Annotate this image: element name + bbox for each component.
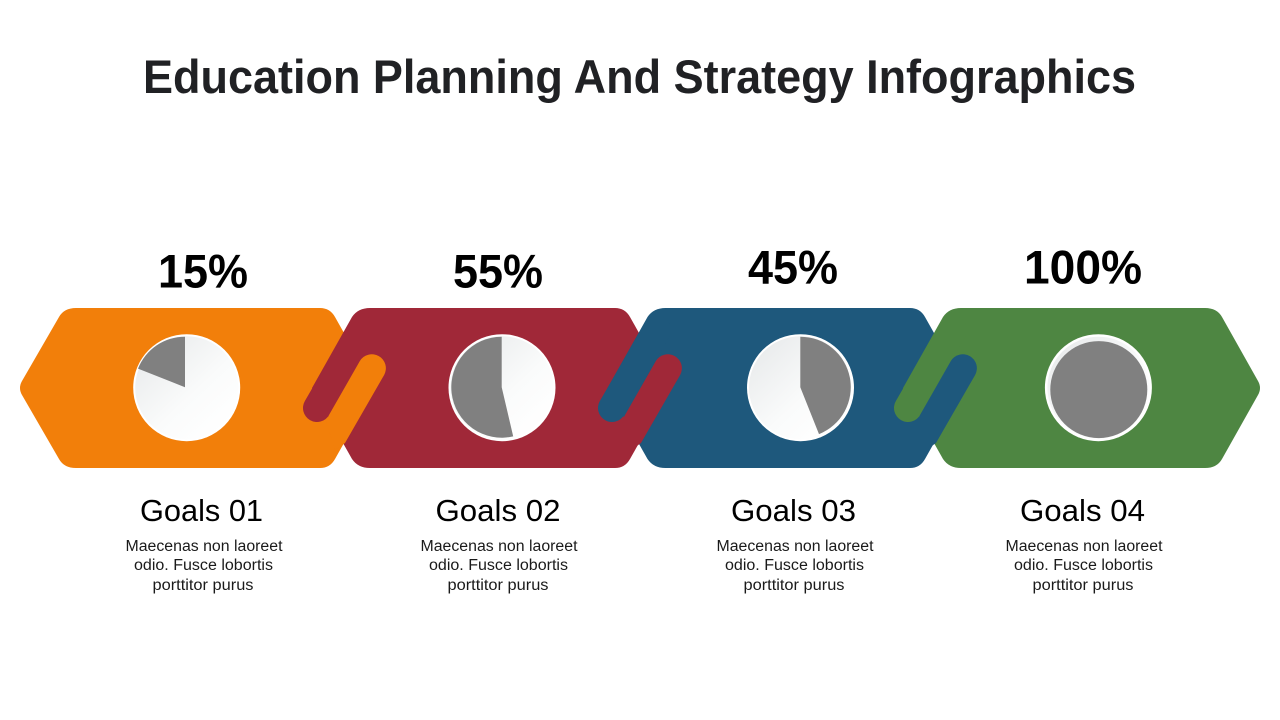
text block: goal 4: Maecenas non laoreet	[1006, 538, 1163, 555]
text block: goal 3: porttitor purus	[744, 577, 845, 594]
connector: red finger	[622, 354, 682, 450]
text block: goal 1: Maecenas non laoreet	[126, 538, 283, 555]
text block: goal 2	[420, 493, 578, 594]
text block: goal 2: Maecenas non laoreet	[420, 538, 578, 555]
percentage: 45%: 45%	[748, 240, 838, 294]
text block: goal 4	[1006, 493, 1163, 594]
text block: goal 2: odio. Fusce lobortis	[429, 557, 568, 574]
text block: goal 3: Maecenas non laoreet	[716, 538, 874, 555]
pie chart: 45%	[747, 334, 854, 441]
text block: goal 3: odio. Fusce lobortis	[725, 557, 864, 574]
pie chart: 55%	[448, 334, 556, 441]
pie chart: 15%	[133, 334, 240, 441]
panel: goal 1 hexagon	[20, 308, 375, 468]
text block: goal 1: porttitor purus	[152, 577, 254, 594]
text block: goal 1	[126, 493, 283, 594]
percentage: 55%: 55%	[453, 244, 543, 298]
text block: goal 2: porttitor purus	[448, 577, 549, 594]
connector: orange finger	[326, 354, 386, 450]
text block: goal 2: Goals 02	[436, 493, 560, 528]
text block: goal 1: Goals 01	[140, 493, 263, 528]
percentage: 100%: 100%	[1024, 240, 1142, 294]
panel: goal 4 hexagon	[903, 308, 1260, 468]
panel: goal 2 hexagon	[312, 308, 670, 468]
percentage: 15%: 15%	[158, 244, 248, 298]
text block: goal 4: Goals 04	[1020, 493, 1145, 528]
text block: goal 1: odio. Fusce lobortis	[134, 557, 273, 574]
text block: goal 3	[716, 493, 874, 594]
pie chart: 100%	[1045, 334, 1152, 441]
connector: blue finger	[917, 354, 977, 450]
title: Education Planning And Strategy Infographics	[143, 50, 1136, 103]
text block: goal 3: Goals 03	[731, 493, 856, 528]
text block: goal 4: porttitor purus	[1032, 577, 1134, 594]
panel: goal 3 hexagon	[608, 308, 965, 468]
text block: goal 4: odio. Fusce lobortis	[1014, 557, 1153, 574]
